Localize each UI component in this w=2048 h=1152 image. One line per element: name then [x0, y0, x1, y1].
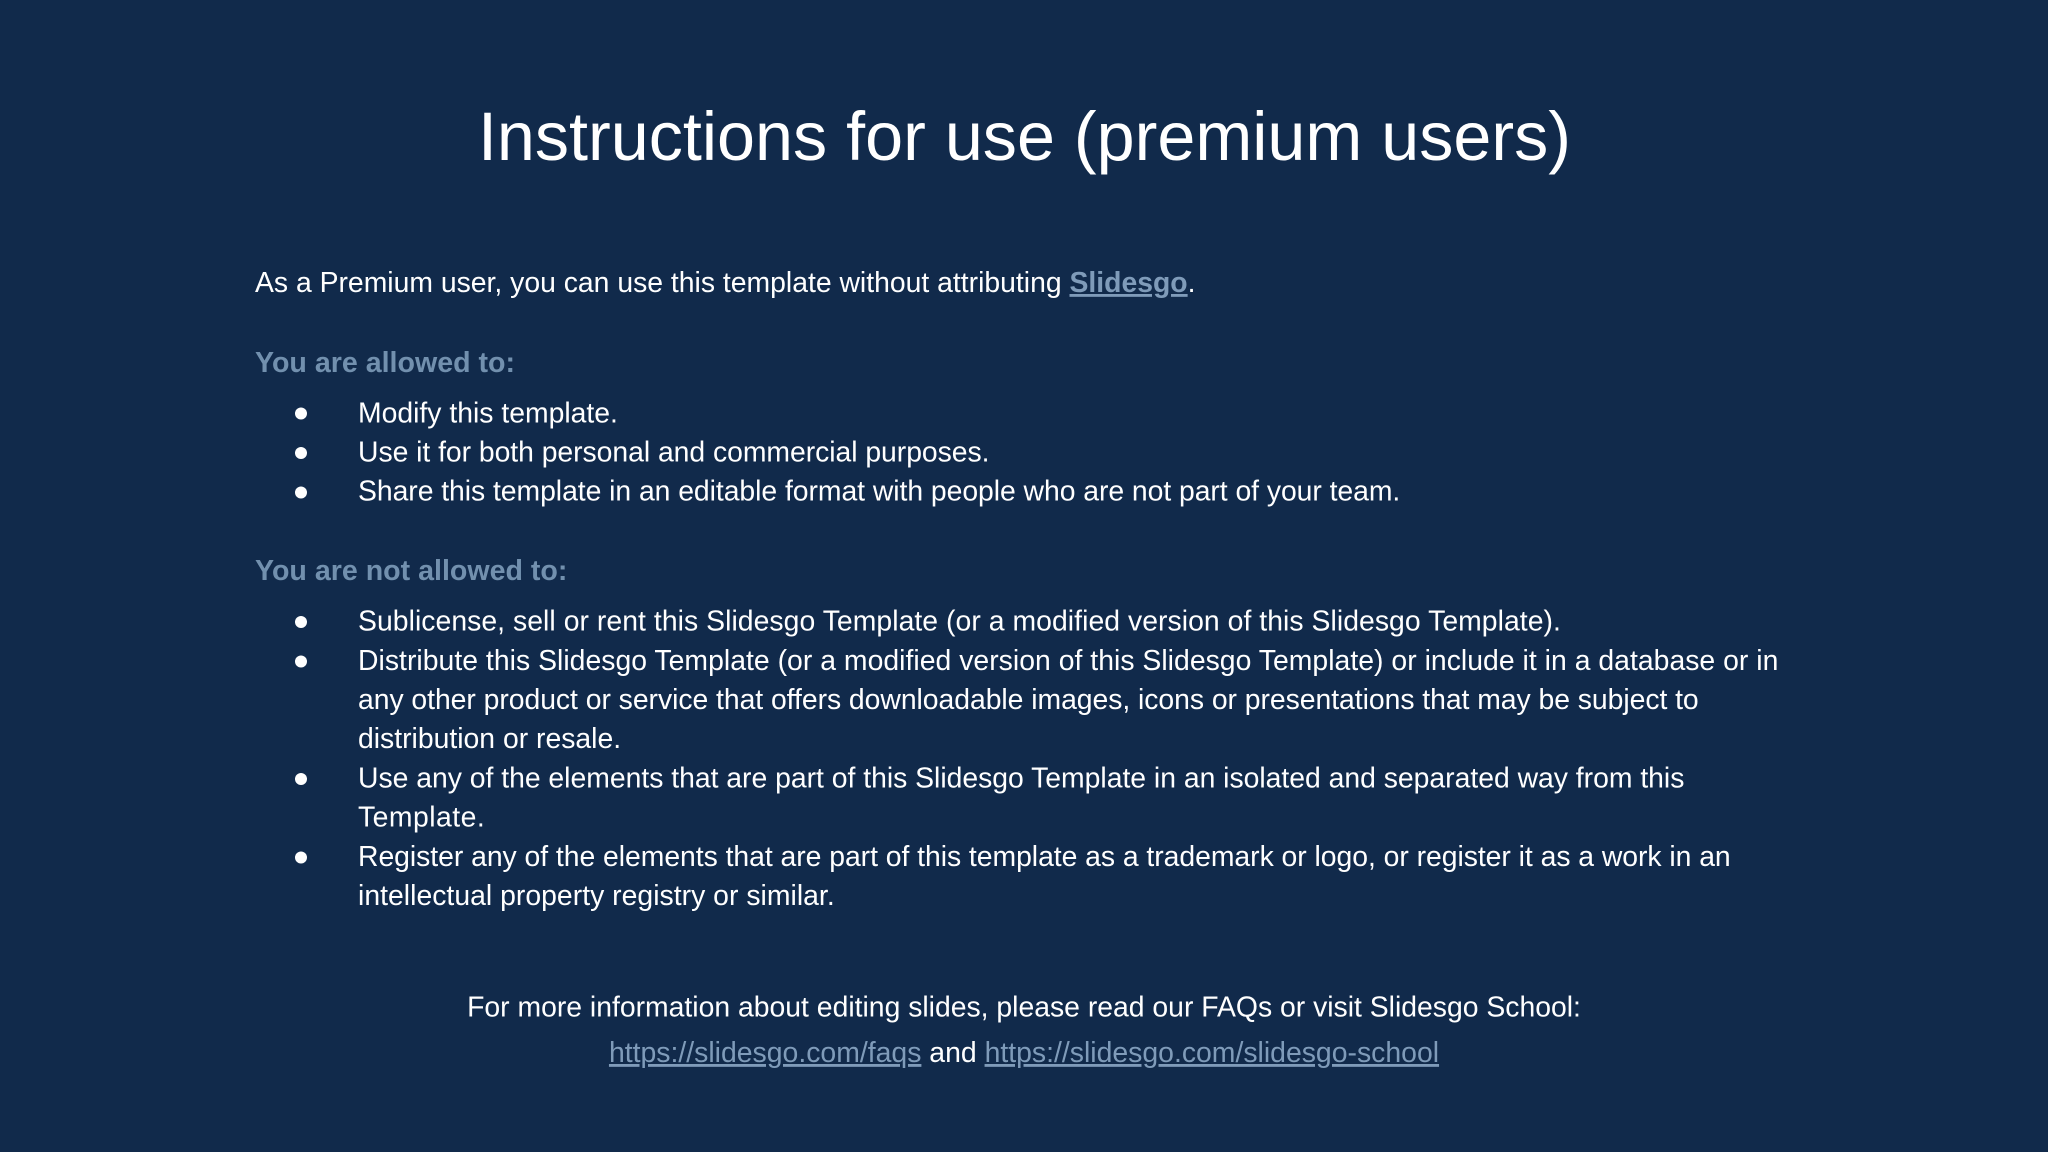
list: not allowed: distribution or resale. [358, 723, 621, 755]
list: allowed: Use it for both personal and commercial purposes. [358, 436, 990, 468]
list: not allowed: Use any of the elements that are part of this Slidesgo Template in an isolated and separated way from this [358, 762, 1684, 794]
list: not allowed: Register any of the elements that are part of this template as a trademark or logo, or register it as a work in an [358, 841, 1731, 873]
intro text: As a Premium user, you can use this template without attributing Slidesgo. [255, 267, 1196, 299]
list: allowed: Modify this template. [358, 398, 618, 430]
title: Instructions for use (premium users) [478, 99, 1571, 175]
list: not allowed: Distribute this Slidesgo Template (or a modified version of this Slidesgo Template) or include it in a database or in [358, 645, 1778, 677]
list: not allowed: Sublicense, sell or rent this Slidesgo Template (or a modified version of this Slidesgo Template). [358, 606, 1561, 638]
list: allowed: Share this template in an editable format with people who are not part of your team. [358, 476, 1400, 508]
list: not allowed: Template. [358, 802, 485, 834]
list: allowed [295, 398, 1400, 508]
list: not allowed: intellectual property registry or similar. [358, 880, 835, 912]
list: not allowed [295, 606, 1778, 912]
heading: allowed: You are allowed to: [255, 347, 515, 379]
heading: not allowed: You are not allowed to: [255, 555, 567, 587]
footer text: For more information about editing slides, please read our FAQs or visit Slidesgo School: [467, 992, 1581, 1024]
footer links: https://slidesgo.com/faqs and https://slidesgo.com/slidesgo-school [609, 1037, 1439, 1069]
list: not allowed: any other product or service that offers downloadable images, icons or presentations that may be subject to [358, 684, 1699, 716]
